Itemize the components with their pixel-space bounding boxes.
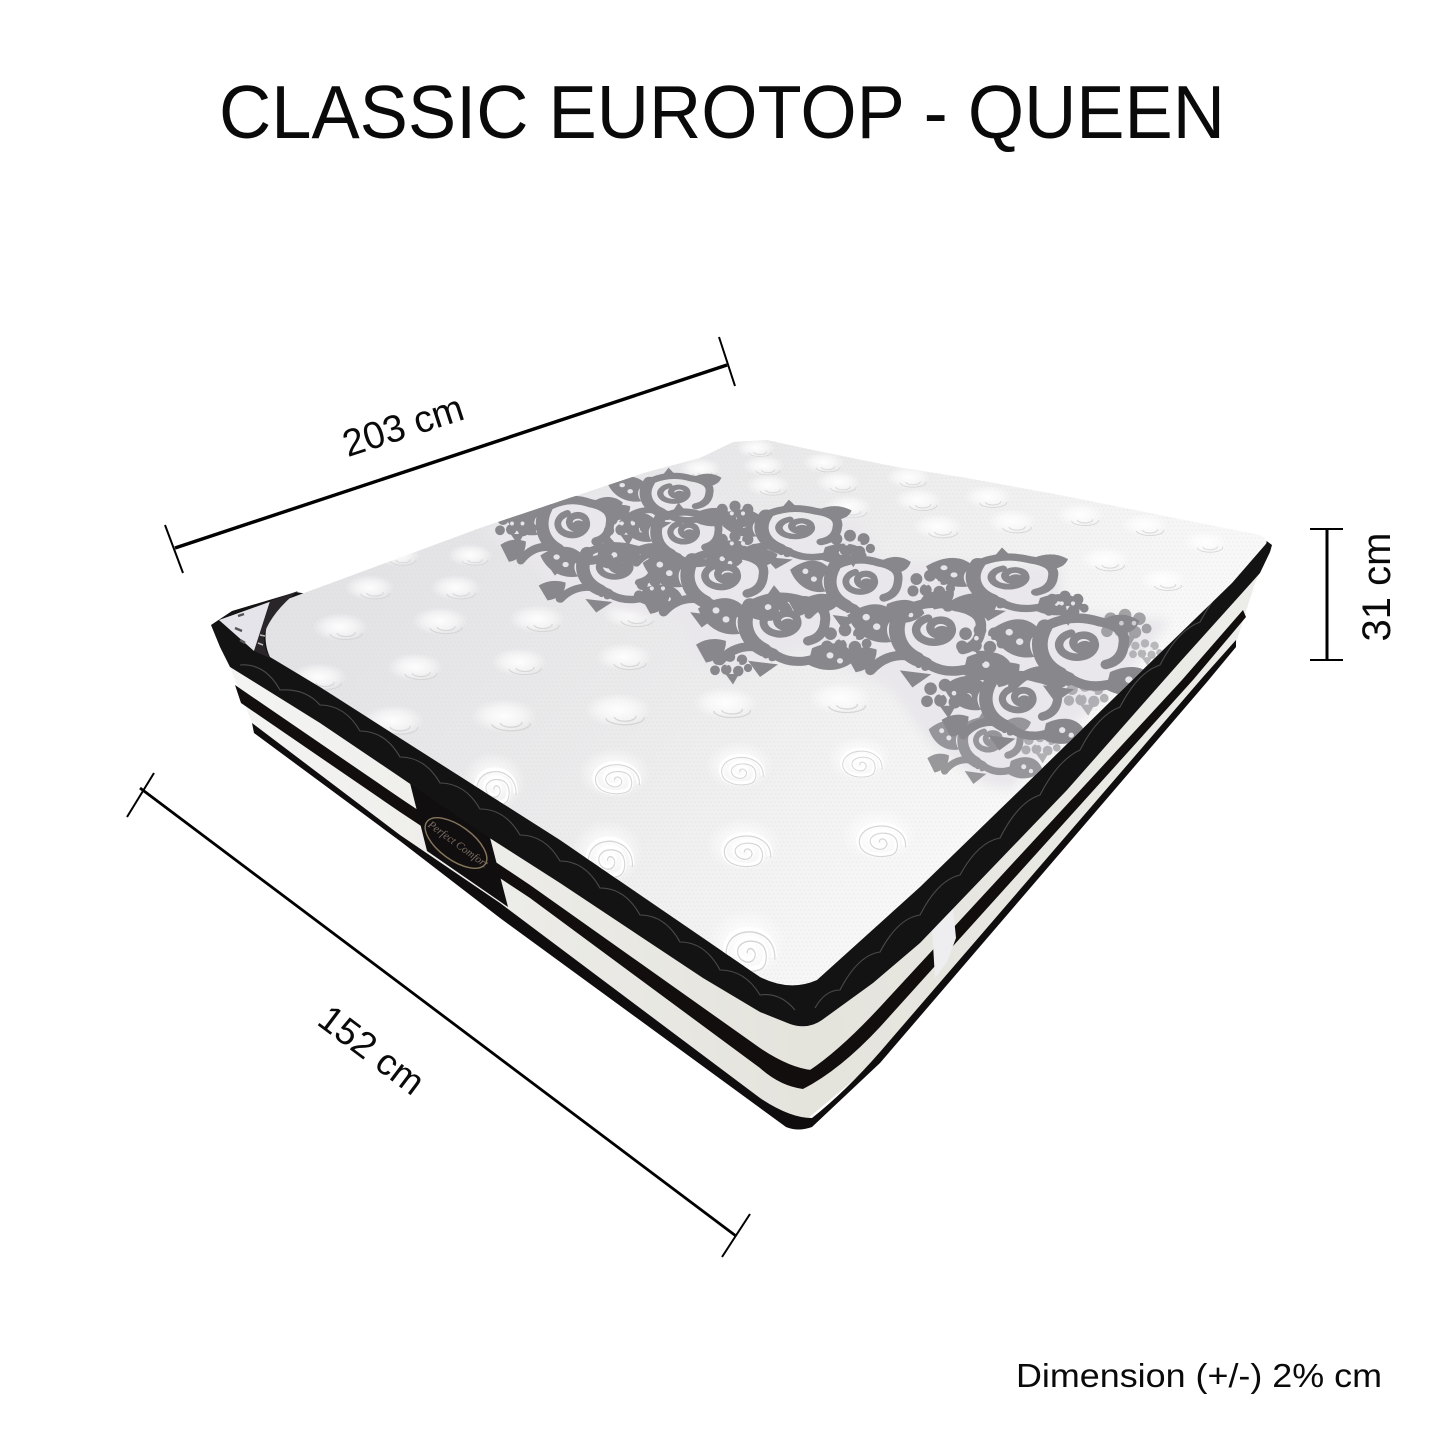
dimension: width 152 cm [127, 773, 750, 1257]
dimension: width 152 cm: 152 cm [311, 997, 432, 1103]
base band [252, 640, 1236, 1130]
mattress [211, 438, 1272, 1130]
piping trim [211, 470, 1272, 1026]
side handle tag [932, 908, 956, 978]
tolerance note: Dimension (+/-) 2% cm [1016, 1357, 1382, 1394]
dimension: height 31 cm: 31 cm [1355, 533, 1399, 641]
dimension: height 31 cm [1310, 529, 1399, 660]
dimension: length 203 cm: 203 cm [338, 387, 469, 466]
side stripe: long side [235, 685, 812, 1089]
black brand label: Perfect Comfort [425, 818, 491, 871]
side stripe: short side [803, 610, 1246, 1089]
mattress side panels [220, 548, 1272, 1130]
damask print band [480, 468, 1170, 790]
dimension: length 203 cm [165, 337, 735, 573]
black brand label [408, 775, 508, 907]
mattress top surface [266, 440, 1267, 985]
corner care label [219, 591, 298, 658]
infographic canvas [126, 85, 1390, 1394]
title: CLASSIC EUROTOP - QUEEN [219, 70, 1225, 154]
pillow-top tufts [291, 438, 1228, 979]
